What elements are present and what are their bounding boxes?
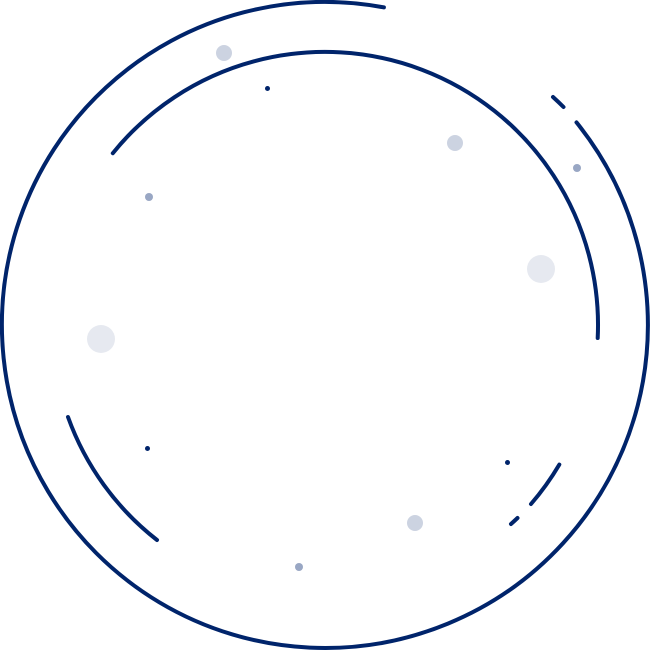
inner ring arcs bbox=[68, 52, 598, 540]
small muted blue dots bbox=[145, 164, 581, 571]
tiny navy dots bbox=[145, 86, 510, 465]
large pale dots bbox=[87, 255, 555, 353]
medium grey-blue dots bbox=[216, 45, 463, 531]
